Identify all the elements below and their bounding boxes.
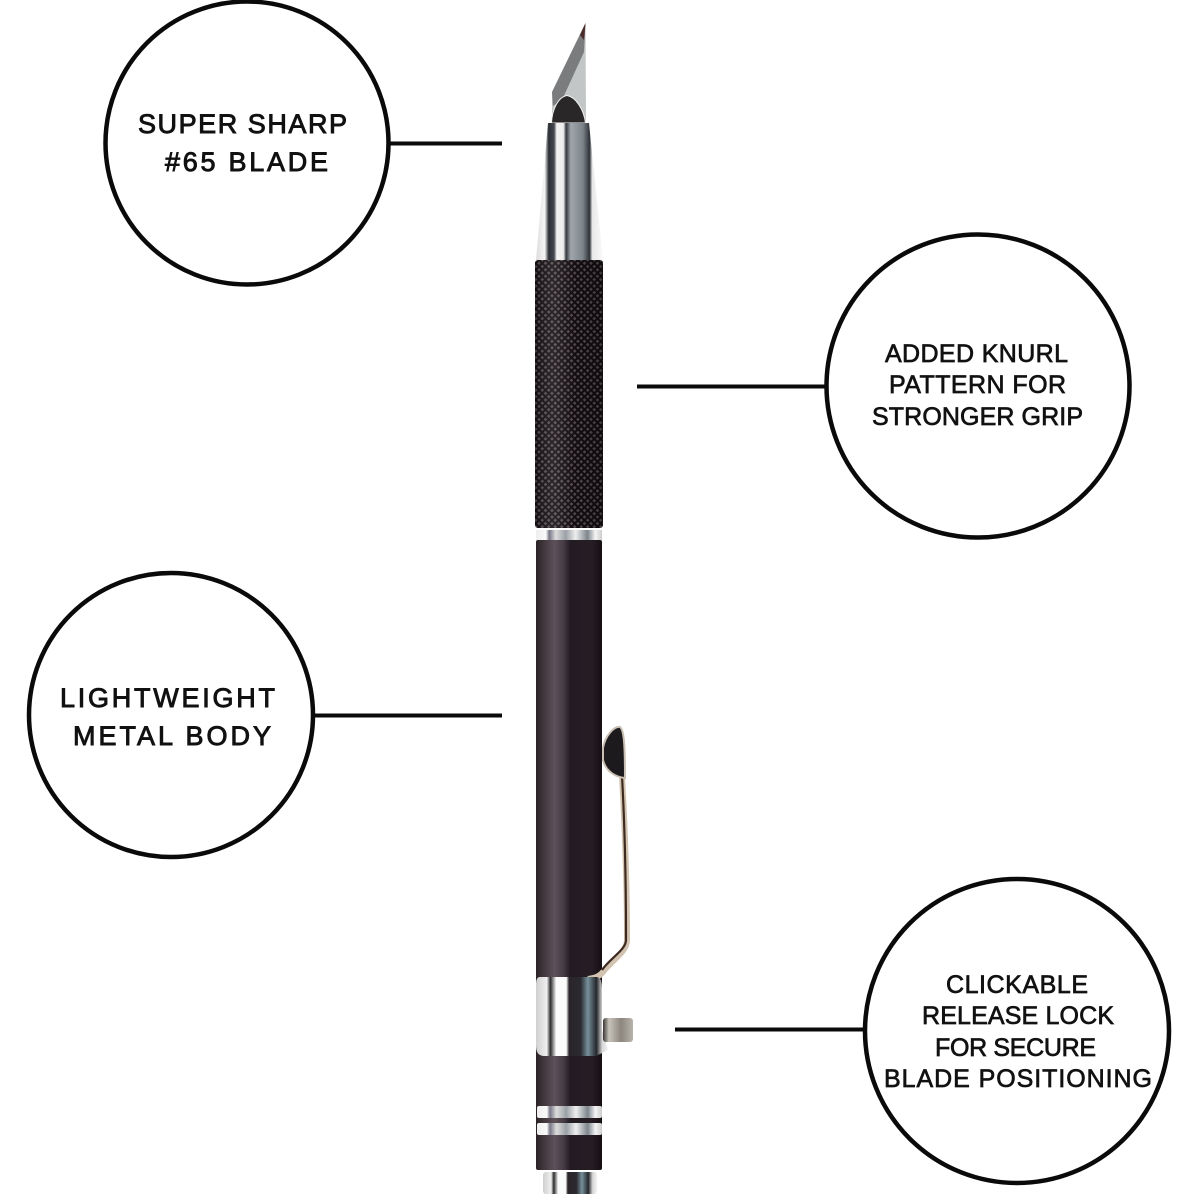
callout: super sharp blade: SUPER SHARP <box>138 109 347 139</box>
callout: lightweight metal body: LIGHTWEIGHT <box>60 683 275 713</box>
end cap <box>543 1172 597 1194</box>
callout: knurl pattern: ADDED KNURL <box>885 340 1068 368</box>
callout: knurl pattern <box>637 234 1130 538</box>
pocket clip <box>588 727 627 979</box>
metal body <box>536 540 602 1170</box>
callout: lightweight metal body: METAL BODY <box>73 721 271 751</box>
callout: clickable release lock: FOR SECURE <box>935 1034 1096 1062</box>
release button <box>603 1018 633 1042</box>
blade holder tip <box>552 96 586 123</box>
callout: clickable release lock <box>675 879 1169 1183</box>
metal ring <box>536 530 602 540</box>
callout: knurl pattern: PATTERN FOR <box>889 371 1066 399</box>
rings <box>537 1106 602 1135</box>
silver cone <box>536 123 603 260</box>
knurled grip <box>535 260 603 528</box>
blade <box>552 23 586 122</box>
callout: lightweight metal body <box>29 573 502 857</box>
callout: knurl pattern: STRONGER GRIP <box>872 403 1083 431</box>
callout: super sharp blade: #65 BLADE <box>165 147 328 177</box>
craft knife illustration <box>535 23 633 1194</box>
callout: super sharp blade <box>106 2 502 284</box>
callout: clickable release lock: CLICKABLE <box>946 971 1088 999</box>
callout: clickable release lock: BLADE POSITIONING <box>884 1065 1152 1093</box>
callout: clickable release lock: RELEASE LOCK <box>922 1002 1114 1030</box>
sliding collar <box>536 977 608 1056</box>
